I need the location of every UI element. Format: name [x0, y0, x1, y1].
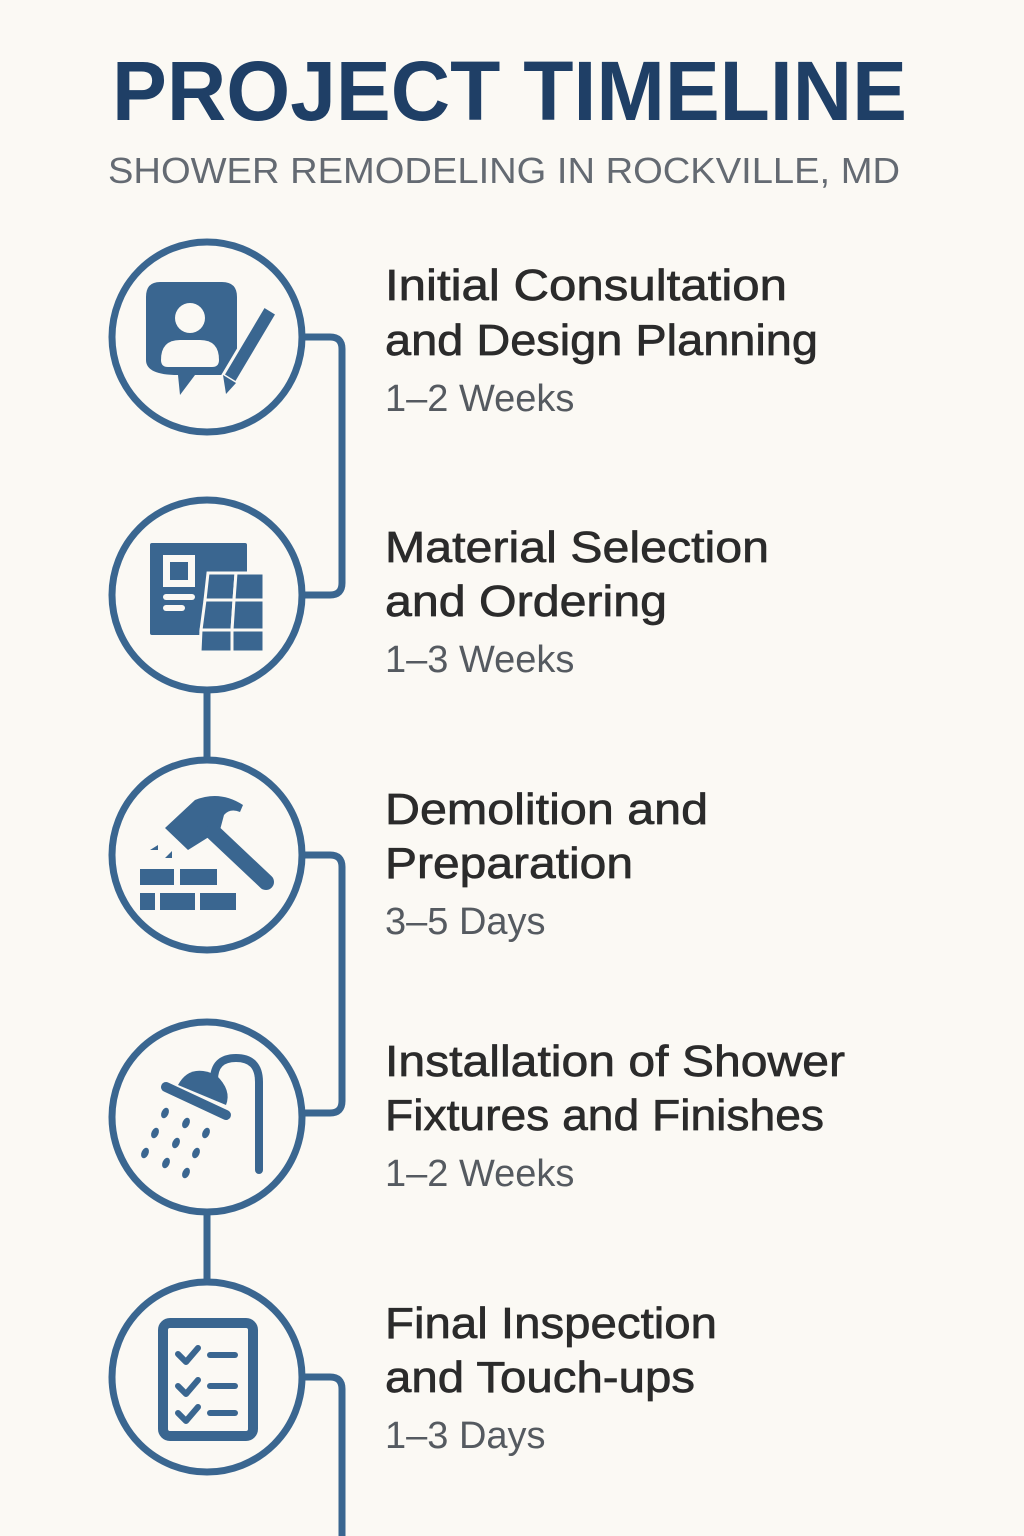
subtitle: SHOWER REMODELING IN ROCKVILLE, MD: [108, 150, 900, 191]
step 5 icon: checklist: [112, 1282, 302, 1472]
step 2 text: [385, 523, 769, 681]
step 1 text: [385, 261, 818, 420]
step 4 text: [385, 1037, 845, 1195]
connector: step 5 onward: [305, 1377, 342, 1536]
connector: step 3 to 4: [305, 855, 342, 1113]
step 1 icon: consultation: [112, 242, 302, 432]
step 4 text: Installation of Shower: [385, 1037, 845, 1086]
step 2 icon: material samples: [112, 500, 302, 690]
step 4 text: 1–2 Weeks: [385, 1153, 574, 1195]
step 5 text: and Touch-ups: [385, 1353, 695, 1402]
step 2 text: and Ordering: [385, 577, 667, 626]
step 4 icon: shower: [112, 1022, 302, 1212]
step 3 text: Demolition and: [385, 785, 708, 834]
connectors: [207, 337, 342, 1536]
connector: step 1 to 2: [305, 337, 342, 595]
step 5 text: [385, 1299, 717, 1457]
step 5 text: 1–3 Days: [385, 1415, 546, 1457]
step 1 text: and Design Planning: [385, 316, 818, 365]
step 1 text: Initial Consultation: [385, 261, 787, 310]
title: PROJECT TIMELINE: [112, 44, 907, 138]
step 5 text: Final Inspection: [385, 1299, 717, 1348]
connector: step 2 to 3: [204, 693, 210, 757]
step 3 icon: demolition: [112, 760, 302, 950]
step 3 text: Preparation: [385, 839, 633, 888]
step 2 text: 1–3 Weeks: [385, 639, 574, 681]
step 2 text: Material Selection: [385, 523, 769, 572]
step 3 text: 3–5 Days: [385, 901, 546, 943]
step 4 text: Fixtures and Finishes: [385, 1091, 824, 1140]
step 3 text: [385, 785, 708, 943]
step 1 text: 1–2 Weeks: [385, 378, 574, 420]
connector: step 4 to 5: [204, 1215, 210, 1280]
